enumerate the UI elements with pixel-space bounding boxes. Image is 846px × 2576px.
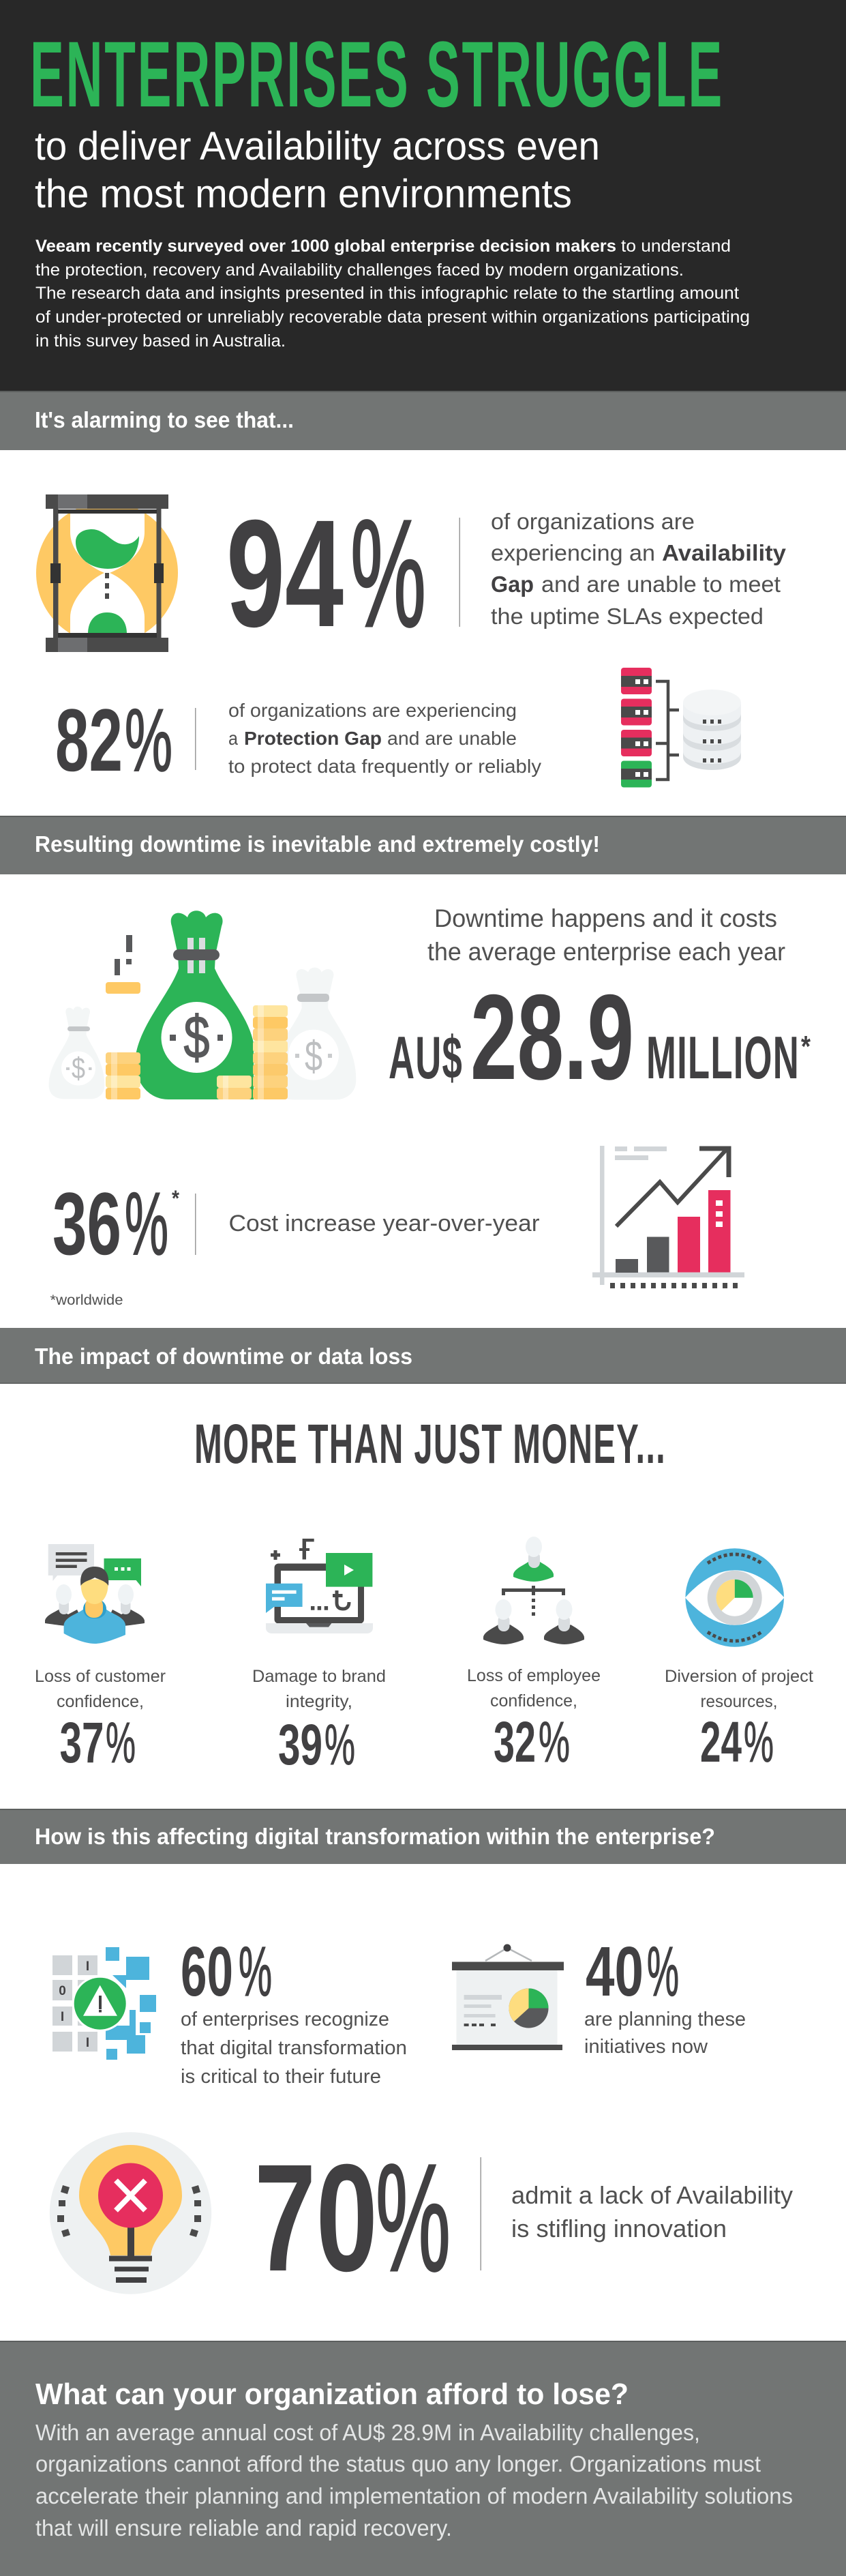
icon: organisation chart — [483, 1537, 584, 1644]
panel: header — [0, 0, 846, 391]
stat: 40%: 40 — [586, 1932, 644, 2011]
intro text — [35, 237, 750, 351]
text: availability gap: of organizations are — [491, 509, 695, 534]
stat: AU$ 28.9 million — [389, 969, 811, 1105]
text: availability gap: experiencing an — [491, 540, 655, 565]
section band: impact — [0, 1328, 846, 1384]
closing heading: What can your organization afford to lose? — [35, 2378, 629, 2411]
stat: 82%: % — [125, 690, 172, 790]
stat: 60%: % — [239, 1932, 272, 2011]
icon: binary blocks and warning — [52, 1947, 156, 2060]
stat: employee confidence: 32 — [494, 1710, 536, 1774]
stat: brand integrity: integrity, — [286, 1692, 352, 1711]
stat: AU$ 28.9 million: 28.9 — [470, 969, 634, 1105]
stat: brand integrity: Damage to brand — [252, 1667, 386, 1686]
text: availability gap: and are unable to meet — [541, 572, 781, 597]
icon: eye with pie chart — [685, 1548, 784, 1647]
main bag: $ — [184, 1003, 210, 1071]
subtitle: to deliver Availability across even — [35, 124, 600, 168]
stat: 40%: % — [647, 1932, 679, 2011]
icon: presentation board — [452, 1944, 564, 2050]
icon: binary blocks and warning: I — [86, 2036, 89, 2050]
subtitle: the most modern environments — [35, 172, 572, 216]
subtitle — [35, 124, 600, 216]
closing body text: that will ensure reliable and rapid recovery. — [35, 2515, 452, 2541]
text: availability gap: the uptime SLAs expected — [491, 604, 764, 629]
text: protection gap: to protect data frequently or reliably — [228, 756, 541, 777]
stat: 36%: 36 — [52, 1174, 121, 1273]
section band: downtime: Resulting downtime is inevitable and extremely costly! — [35, 831, 600, 857]
stat: employee confidence: % — [539, 1710, 570, 1774]
intro text: to understand — [621, 237, 731, 256]
text: stifling innovation: admit a lack of Availability — [511, 2181, 793, 2209]
stat: customer confidence: Loss of customer — [35, 1667, 166, 1686]
stat: project resources — [665, 1667, 813, 1774]
stat: 70%: % — [376, 2133, 451, 2303]
icon: customers — [45, 1544, 145, 1644]
panel: closing message — [0, 2341, 846, 2576]
text: downtime cost: the average enterprise each year — [427, 938, 785, 966]
icon: hourglass — [36, 494, 178, 652]
text: availability gap: Availability — [662, 540, 787, 565]
stat: employee confidence: Loss of employee — [467, 1666, 601, 1685]
stat: brand integrity: % — [324, 1713, 355, 1777]
section band: impact: The impact of downtime or data loss — [35, 1344, 412, 1369]
stat: customer confidence: % — [106, 1711, 136, 1775]
chart: rising bars — [592, 1146, 744, 1288]
closing body text: accelerate their planning and implementation of modern Availability solutions — [35, 2483, 793, 2508]
intro text: of under-protected or unreliably recoverable data present within organizations participating — [35, 308, 750, 327]
stat: AU$ 28.9 million: AU$ — [389, 1024, 463, 1091]
text: availability gap: Gap — [491, 572, 534, 597]
closing body text: With an average annual cost of AU$ 28.9M in Availability challenges, — [35, 2420, 700, 2445]
closing body text: organizations cannot afford the status quo any longer. Organizations must — [35, 2451, 761, 2476]
text: planning initiatives: are planning these — [584, 2009, 746, 2030]
text: downtime cost — [427, 904, 785, 966]
icon: binary blocks and warning: 0 — [59, 1984, 66, 1998]
stat: 94%: % — [350, 488, 426, 659]
text: planning initiatives: initiatives now — [584, 2036, 708, 2058]
text: digital transformation critical — [181, 2009, 407, 2088]
stat: employee confidence: confidence, — [490, 1691, 577, 1711]
stat: 60%: 60 — [181, 1932, 233, 2011]
icon: binary blocks and warning: I — [61, 2010, 64, 2024]
intro text: the protection, recovery and Availability challenges faced by modern organizations. — [35, 261, 684, 280]
icon: laptop and social media — [266, 1539, 373, 1633]
stat: 70%: 70 — [254, 2133, 378, 2303]
stat: AU$ 28.9 million: * — [801, 1030, 811, 1063]
intro text: Veeam recently surveyed over 1000 global enterprise decision makers — [35, 237, 616, 256]
faint right bag — [270, 968, 356, 1099]
stat: 94%: 94 — [226, 488, 344, 659]
stat: customer confidence — [35, 1667, 166, 1775]
stat: 36%: * — [172, 1186, 179, 1211]
stat: brand integrity — [252, 1667, 386, 1777]
closing body text — [35, 2420, 793, 2541]
section band: digital transformation — [0, 1809, 846, 1864]
coins — [106, 982, 288, 1099]
text: protection gap: Protection Gap — [244, 728, 382, 749]
main bag — [135, 911, 254, 1099]
section band: downtime — [0, 816, 846, 874]
intro text: The research data and insights presented in this infographic relate to the startling amount — [35, 284, 739, 303]
icon: money bags and coins — [49, 911, 356, 1099]
text: cost increase: Cost increase year-over-year — [229, 1211, 540, 1237]
intro text: in this survey based in Australia. — [35, 331, 286, 351]
text: downtime cost: Downtime happens and it costs — [434, 904, 777, 932]
section band: alarming — [0, 391, 846, 450]
stat: project resources: % — [744, 1710, 774, 1774]
text: availability gap — [491, 509, 787, 629]
text: stifling innovation: is stifling innovation — [511, 2215, 727, 2242]
text: digital transformation critical: that digital transformation — [181, 2037, 407, 2059]
stat: 82%: 82 — [55, 690, 123, 790]
stat: brand integrity: 39 — [278, 1713, 322, 1777]
stat: employee confidence — [467, 1666, 601, 1774]
text: digital transformation critical: is critical to their future — [181, 2066, 381, 2088]
faint left bag: $ — [72, 1052, 85, 1085]
faint left bag — [49, 1007, 104, 1099]
text: protection gap: a — [228, 728, 238, 749]
text: worldwide note: *worldwide — [50, 1292, 123, 1308]
stat: project resources: Diversion of project — [665, 1667, 813, 1686]
stat: 36%: % — [125, 1174, 168, 1273]
section band: digital transformation: How is this affecting digital transformation within the enterprise? — [35, 1824, 715, 1849]
icon: servers and database — [621, 668, 741, 787]
text: digital transformation critical: of enterprises recognize — [181, 2009, 389, 2030]
text: stifling innovation — [511, 2181, 793, 2242]
section band: alarming: It's alarming to see that... — [35, 407, 294, 432]
icon: light bulb with cross — [50, 2132, 211, 2294]
stat: customer confidence: confidence, — [57, 1692, 144, 1711]
text: protection gap: of organizations are experiencing — [228, 700, 517, 721]
icon: binary blocks and warning: I — [86, 1959, 89, 1974]
text: protection gap — [228, 700, 541, 777]
stat: project resources: resources, — [701, 1692, 777, 1711]
text: protection gap: and are unable — [387, 728, 517, 749]
stat: project resources: 24 — [700, 1710, 742, 1774]
stat: customer confidence: 37 — [60, 1711, 104, 1775]
text: planning initiatives — [584, 2009, 746, 2058]
faint right bag: $ — [305, 1033, 322, 1080]
